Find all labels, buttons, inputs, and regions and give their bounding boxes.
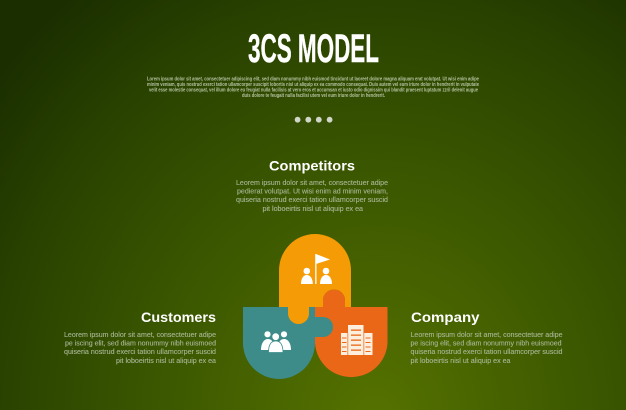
- pagination dots: [295, 117, 332, 123]
- intro paragraph: minim veniam, quis nostrud exerci tation ullamcorper suscipit lobortis nisl ut aliquip ex ea commodo consequat. Duis autem vel eum iriure dolor in hendrerit in vulputate: [147, 82, 479, 88]
- puzzle diagram: [243, 234, 388, 379]
- heading: customers: Customers: [141, 309, 216, 325]
- text: customers description: pe iscing elit, sed diam nonummy nibh euismoed: [65, 338, 216, 348]
- text: customers description: [64, 330, 216, 365]
- text: company description: pit loboeirtis nisl ut aliquip ex ea: [410, 356, 510, 365]
- text: competitors description: Leorem ipsum dolor sit amet, consectetuer adipe: [236, 178, 388, 187]
- text: competitors description: pit loboeirtis nisl ut aliquip ex ea: [262, 204, 363, 213]
- panel: customers: [64, 309, 216, 365]
- icon: group of three people: [261, 331, 291, 352]
- text: competitors description: pedierat volutpat. Ut wisi enim ad minim veniam,: [237, 186, 388, 196]
- title: 3CS MODEL: [248, 27, 379, 71]
- panel: competitors: [236, 158, 388, 213]
- intro paragraph: Lorem ipsum dolor sit amet, consectetuer adipiscing elit, sed diam nonummy nibh euismod tincidunt ut laoreet dolore magna aliquam erat volutpat. Ut wisi enim adipe: [147, 76, 479, 82]
- panel: company: [410, 309, 562, 365]
- puzzle piece: competitors (amber): [279, 234, 351, 324]
- text: customers description: quiseria nostrud exerci tation ullamcorper suscid: [64, 347, 216, 356]
- intro paragraph: duis dolore te feugait nulla facilisi utem vel eum iriure dolor in hendrerit.: [242, 93, 386, 99]
- text: company description: pe iscing elit, sed diam nonummy nibh euismoed: [410, 338, 562, 348]
- text: customers description: Leorem ipsum dolor sit amet, consectetuer adipe: [64, 330, 216, 339]
- intro paragraph: velit esse molestie consequat, vel illum dolore eu feugiat nulla facilisis at vero eros et accumsan et iusto odio dignissim qui blandit praesent luptatum zzril delenit augue: [149, 88, 478, 94]
- heading: competitors: Competitors: [269, 158, 355, 174]
- heading: company: Company: [411, 309, 480, 325]
- text: company description: Leorem ipsum dolor sit amet, consectetuer adipe: [410, 330, 562, 339]
- text: competitors description: [236, 178, 388, 213]
- icon: flag between two people: [301, 254, 332, 284]
- text: customers description: pit loboeirtis nisl ut aliquip ex ea: [116, 356, 216, 365]
- intro paragraph: [147, 76, 479, 99]
- puzzle piece: customers (teal): [243, 307, 333, 379]
- text: competitors description: quiseria nostrud exerci tation ullamcorper suscid: [236, 195, 388, 204]
- text: company description: quiseria nostrud exerci tation ullamcorper suscid: [410, 347, 562, 356]
- puzzle piece: company (orange-red): [315, 290, 388, 377]
- icon: office buildings: [341, 325, 372, 355]
- text: company description: [410, 330, 562, 365]
